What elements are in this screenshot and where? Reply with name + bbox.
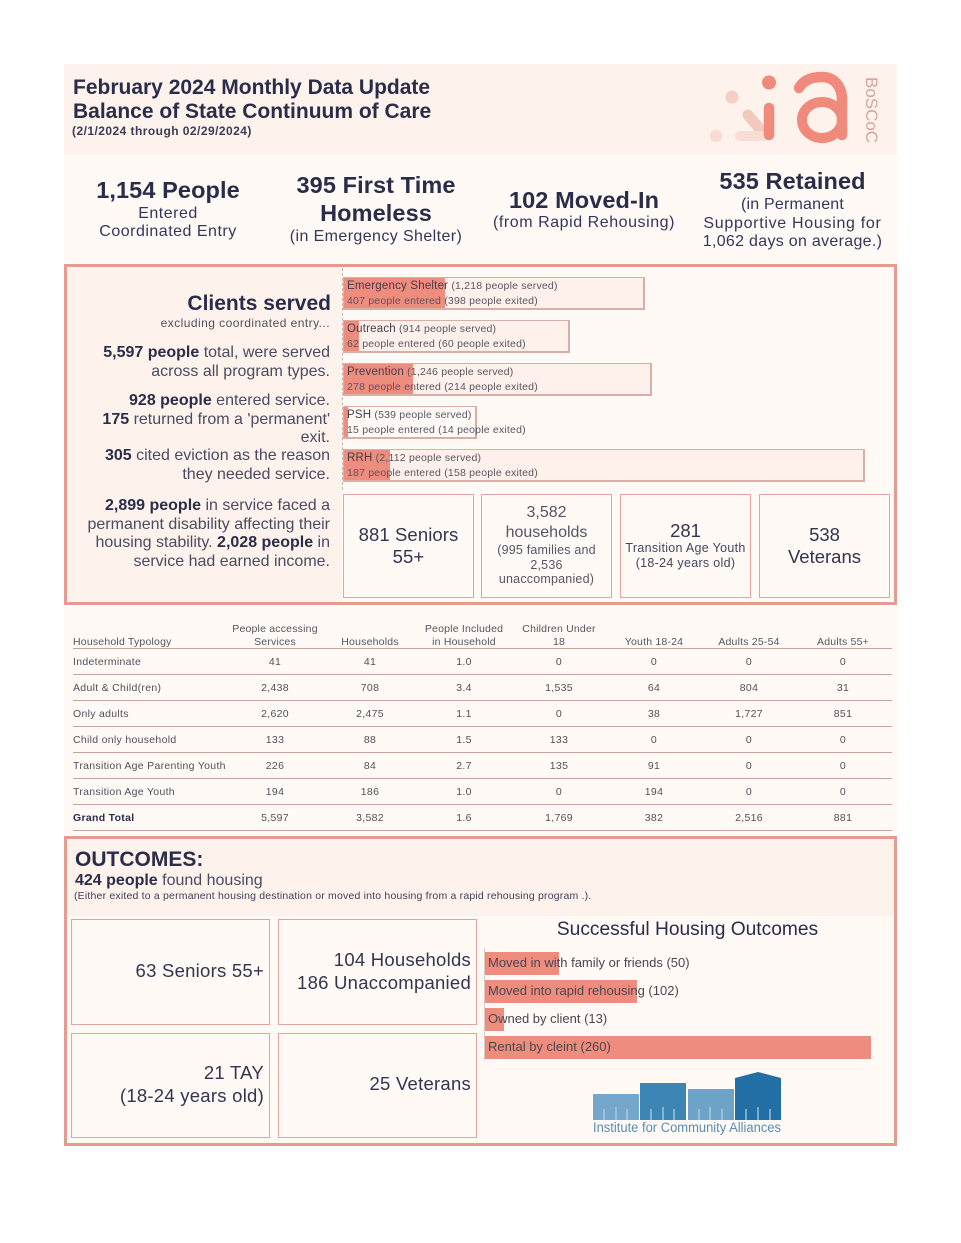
table header: Services bbox=[254, 636, 296, 648]
card: veterans bbox=[759, 494, 890, 598]
card: seniors: 55+ bbox=[393, 546, 424, 567]
table: household typology bbox=[73, 623, 892, 649]
date range: (2/1/2024 through 02/29/2024) bbox=[72, 124, 252, 138]
row: grand total bbox=[73, 805, 892, 831]
card: transition age youth bbox=[620, 494, 751, 598]
row: child only bbox=[73, 727, 892, 753]
row: indeterminate: 0 bbox=[840, 656, 846, 668]
row: only adults: 1,727 bbox=[735, 708, 763, 720]
stat: people entered coordinated entry: Coordinated Entry bbox=[99, 223, 237, 240]
stat: moved-in: 102 Moved-In bbox=[509, 187, 659, 213]
row: transition age youth: Transition Age Youth bbox=[73, 786, 175, 798]
row: only adults: 2,620 bbox=[261, 708, 289, 720]
icon: Institute for Community Alliances logo bbox=[593, 1072, 781, 1135]
row: transition age parenting youth: Transition Age Parenting Youth bbox=[73, 760, 226, 772]
row: grand total: 382 bbox=[645, 812, 663, 824]
text: outcomes note: (Either exited to a permanent housing destination or moved into housing from a rapid rehousing program .). bbox=[74, 890, 591, 902]
row: transition age youth bbox=[73, 779, 892, 805]
row: indeterminate: 41 bbox=[364, 656, 376, 668]
row: indeterminate: 0 bbox=[746, 656, 752, 668]
row: transition age parenting youth: 0 bbox=[746, 760, 752, 772]
row: only adults bbox=[73, 701, 892, 727]
stat: people entered coordinated entry bbox=[96, 177, 240, 240]
card text: 21 TAY bbox=[204, 1062, 264, 1083]
stat: retained in permanent supportive housing: (in Permanent bbox=[741, 196, 844, 213]
label: rapid rehousing: Moved into rapid rehousing (102) bbox=[488, 983, 679, 998]
heading: successful housing outcomes: Successful Housing Outcomes bbox=[557, 919, 818, 940]
card: veterans housed bbox=[278, 1033, 477, 1138]
row: transition age youth: 1.0 bbox=[456, 786, 472, 798]
table header: Household Typology bbox=[73, 636, 172, 648]
card: households housed bbox=[278, 919, 477, 1025]
text: disability and income: 2,899 people in service faced a bbox=[105, 497, 330, 514]
heading: outcomes: OUTCOMES: bbox=[75, 848, 203, 871]
row: grand total: 2,516 bbox=[735, 812, 763, 824]
row: child only: 0 bbox=[746, 734, 752, 746]
card: transition age youth: Transition Age Youth bbox=[625, 541, 746, 555]
row: child only: 133 bbox=[266, 734, 284, 746]
table header: Adults 55+ bbox=[817, 636, 869, 648]
row: only adults: Only adults bbox=[73, 708, 129, 720]
row: grand total: Grand Total bbox=[73, 812, 134, 824]
stat: retained in permanent supportive housing: 1,062 days on average.) bbox=[703, 233, 882, 250]
bar: emergency shelter: 407 people entered (398 people exited) bbox=[347, 295, 538, 307]
row: child only: 0 bbox=[651, 734, 657, 746]
row: transition age youth: 194 bbox=[645, 786, 663, 798]
row: only adults: 2,475 bbox=[356, 708, 384, 720]
table header: Adults 25-54 bbox=[718, 636, 780, 648]
card: households: unaccompanied) bbox=[499, 572, 594, 586]
row: child only: 88 bbox=[364, 734, 376, 746]
title: February 2024 Monthly Data Update bbox=[73, 76, 430, 99]
row: transition age parenting youth: 91 bbox=[648, 760, 660, 772]
row: transition age parenting youth: 84 bbox=[364, 760, 376, 772]
bar: outreach: 62 people entered (60 people exited) bbox=[347, 338, 526, 350]
row: transition age parenting youth: 135 bbox=[550, 760, 568, 772]
icon: ia BoSCoC logo bbox=[710, 72, 881, 143]
bar: owned by client bbox=[485, 1008, 504, 1031]
heading: clients served: Clients served bbox=[187, 292, 331, 315]
stat: moved-in bbox=[493, 187, 675, 231]
bar: prevention bbox=[343, 363, 652, 396]
row: transition age youth: 186 bbox=[361, 786, 379, 798]
table header: People Included bbox=[425, 623, 503, 635]
row: indeterminate bbox=[73, 649, 892, 675]
bar: emergency shelter bbox=[343, 277, 645, 310]
card text: 104 Households bbox=[334, 949, 471, 970]
row: adult and children: 64 bbox=[648, 682, 660, 694]
row: child only: Child only household bbox=[73, 734, 176, 746]
text: people served: 5,597 people total, were served bbox=[103, 344, 330, 361]
bar chart: programs bbox=[342, 268, 867, 490]
card text: 186 Unaccompanied bbox=[297, 972, 471, 993]
text: eviction bbox=[105, 447, 330, 482]
row: transition age parenting youth: 2.7 bbox=[456, 760, 472, 772]
row: transition age youth: 0 bbox=[556, 786, 562, 798]
text: entered service: 928 people entered service. bbox=[129, 392, 330, 409]
row: grand total: 3,582 bbox=[356, 812, 384, 824]
stat: retained in permanent supportive housing: Supportive Housing for bbox=[703, 214, 882, 232]
row: indeterminate: Indeterminate bbox=[73, 656, 141, 668]
header band bbox=[64, 64, 897, 155]
bar: moved in with family bbox=[485, 952, 559, 975]
stat: retained in permanent supportive housing: 535 Retained bbox=[719, 168, 866, 194]
bar: emergency shelter: Emergency Shelter (1,218 people served) bbox=[347, 280, 558, 292]
table header: Youth 18-24 bbox=[625, 636, 683, 648]
table header: Households bbox=[341, 636, 399, 648]
stat: people entered coordinated entry: Entered bbox=[138, 205, 198, 222]
row: only adults: 1.1 bbox=[456, 708, 472, 720]
card: households: 2,536 bbox=[530, 558, 563, 572]
card text bbox=[120, 1062, 264, 1106]
text: disability and income: service had earned income. bbox=[133, 552, 330, 570]
card: veterans: 538 bbox=[809, 524, 840, 545]
row: transition age parenting youth: 0 bbox=[840, 760, 846, 772]
card: households bbox=[481, 494, 612, 598]
table header: 18 bbox=[553, 636, 565, 648]
row: indeterminate: 41 bbox=[269, 656, 281, 668]
card: households: 3,582 bbox=[526, 504, 567, 521]
bar chart: housing outcomes bbox=[484, 948, 874, 1060]
icon: ia BoSCoC logo: BoSCoC bbox=[862, 77, 881, 143]
bar: rental by client bbox=[485, 1036, 871, 1059]
row: adult and children: 3.4 bbox=[456, 682, 472, 694]
table rows bbox=[73, 656, 892, 831]
stat: first time homeless: 395 First Time bbox=[296, 172, 456, 198]
row: adult and children: 2,438 bbox=[261, 682, 289, 694]
bar: RRH: RRH (2,112 people served) bbox=[347, 452, 481, 464]
stat: people entered coordinated entry: 1,154 People bbox=[96, 177, 240, 203]
row: transition age youth: 194 bbox=[266, 786, 284, 798]
bar: RRH: 187 people entered (158 people exited) bbox=[347, 467, 538, 479]
text: eviction: 305 cited eviction as the reason bbox=[105, 447, 330, 464]
subheading: excluding coordinated entry... bbox=[161, 316, 330, 330]
stat: retained in permanent supportive housing bbox=[703, 168, 882, 250]
bar: RRH bbox=[343, 449, 865, 482]
row: indeterminate: 0 bbox=[651, 656, 657, 668]
card: veterans: Veterans bbox=[788, 546, 861, 567]
card: TAY housed bbox=[71, 1033, 270, 1138]
row: transition age youth: 0 bbox=[746, 786, 752, 798]
card: transition age youth: 281 bbox=[670, 520, 701, 541]
text: entered service bbox=[102, 392, 330, 446]
outcomes header band bbox=[67, 839, 894, 916]
text: people served bbox=[103, 344, 330, 380]
bar: PSH: 15 people entered (14 people exited) bbox=[347, 424, 526, 436]
row: grand total: 1.6 bbox=[456, 812, 472, 824]
row: only adults: 38 bbox=[648, 708, 660, 720]
title: Balance of State Continuum of Care bbox=[73, 100, 431, 123]
stat: first time homeless: (in Emergency Shelter) bbox=[290, 228, 462, 245]
text: disability and income bbox=[87, 497, 330, 570]
right side lighter area bbox=[342, 267, 894, 602]
bar: outreach bbox=[343, 320, 570, 353]
text: entered service: 175 returned from a 'permanent' bbox=[102, 410, 330, 428]
row: transition age parenting youth: 226 bbox=[266, 760, 284, 772]
table header: People accessing bbox=[232, 623, 318, 635]
card text: 63 Seniors 55+ bbox=[136, 960, 264, 981]
report background bbox=[64, 64, 897, 1146]
text: disability and income: housing stability. 2,028 people in bbox=[96, 534, 330, 551]
bar: prevention: Prevention (1,246 people served) bbox=[347, 366, 513, 378]
bar: PSH bbox=[343, 406, 477, 439]
row: grand total: 1,769 bbox=[545, 812, 573, 824]
table header bbox=[73, 623, 869, 648]
text: disability and income: permanent disability affecting their bbox=[87, 516, 330, 532]
text: people found housing: 424 people found housing bbox=[75, 872, 263, 889]
table header: in Household bbox=[432, 636, 496, 648]
icon: Institute for Community Alliances logo: Institute for Community Alliances bbox=[593, 1120, 781, 1135]
bar: PSH: PSH (539 people served) bbox=[347, 409, 472, 421]
table header: Children Under bbox=[522, 623, 596, 635]
text: entered service: exit. bbox=[301, 429, 330, 446]
row: grand total: 5,597 bbox=[261, 812, 289, 824]
label: moved in with family: Moved in with family or friends (50) bbox=[488, 955, 690, 970]
panel: clients served bbox=[64, 264, 897, 605]
row: child only: 1.5 bbox=[456, 734, 472, 746]
bar: prevention: 278 people entered (214 people exited) bbox=[347, 381, 538, 393]
title bbox=[73, 76, 431, 123]
bar: outreach: Outreach (914 people served) bbox=[347, 323, 496, 335]
row: transition age parenting youth bbox=[73, 753, 892, 779]
row: indeterminate: 0 bbox=[556, 656, 562, 668]
label: rental by client: Rental by cleint (260) bbox=[488, 1039, 611, 1054]
row: indeterminate: 1.0 bbox=[456, 656, 472, 668]
card: seniors: 881 Seniors bbox=[359, 524, 458, 545]
row: adult and children: 708 bbox=[361, 682, 379, 694]
row: grand total: 881 bbox=[834, 812, 852, 824]
row: transition age youth: 0 bbox=[840, 786, 846, 798]
card: seniors bbox=[343, 494, 474, 598]
label: owned by client: Owned by client (13) bbox=[488, 1011, 607, 1026]
row: adult and children: Adult & Child(ren) bbox=[73, 682, 161, 694]
row: only adults: 0 bbox=[556, 708, 562, 720]
card: households: households bbox=[506, 524, 587, 540]
card: households: (995 families and bbox=[497, 543, 596, 557]
stat: first time homeless: Homeless bbox=[320, 200, 432, 226]
card: transition age youth: (18-24 years old) bbox=[636, 556, 735, 570]
row: child only: 0 bbox=[840, 734, 846, 746]
panel: outcomes bbox=[64, 836, 897, 1146]
row: only adults: 851 bbox=[834, 708, 852, 720]
card: seniors housed bbox=[71, 919, 270, 1025]
stat: moved-in: (from Rapid Rehousing) bbox=[493, 214, 675, 231]
stat: first time homeless bbox=[290, 172, 462, 245]
text: eviction: they needed service. bbox=[182, 466, 330, 482]
card text bbox=[297, 949, 471, 993]
row: adult and children: 31 bbox=[837, 682, 849, 694]
text: people served: across all program types. bbox=[151, 362, 330, 380]
bar: rapid rehousing bbox=[485, 980, 637, 1003]
row: adult and children: 1,535 bbox=[545, 682, 573, 694]
row: child only: 133 bbox=[550, 734, 568, 746]
row: adult and children: 804 bbox=[740, 682, 758, 694]
card text: (18-24 years old) bbox=[120, 1085, 264, 1106]
card text: 25 Veterans bbox=[370, 1073, 471, 1094]
row: adult and children bbox=[73, 675, 892, 701]
